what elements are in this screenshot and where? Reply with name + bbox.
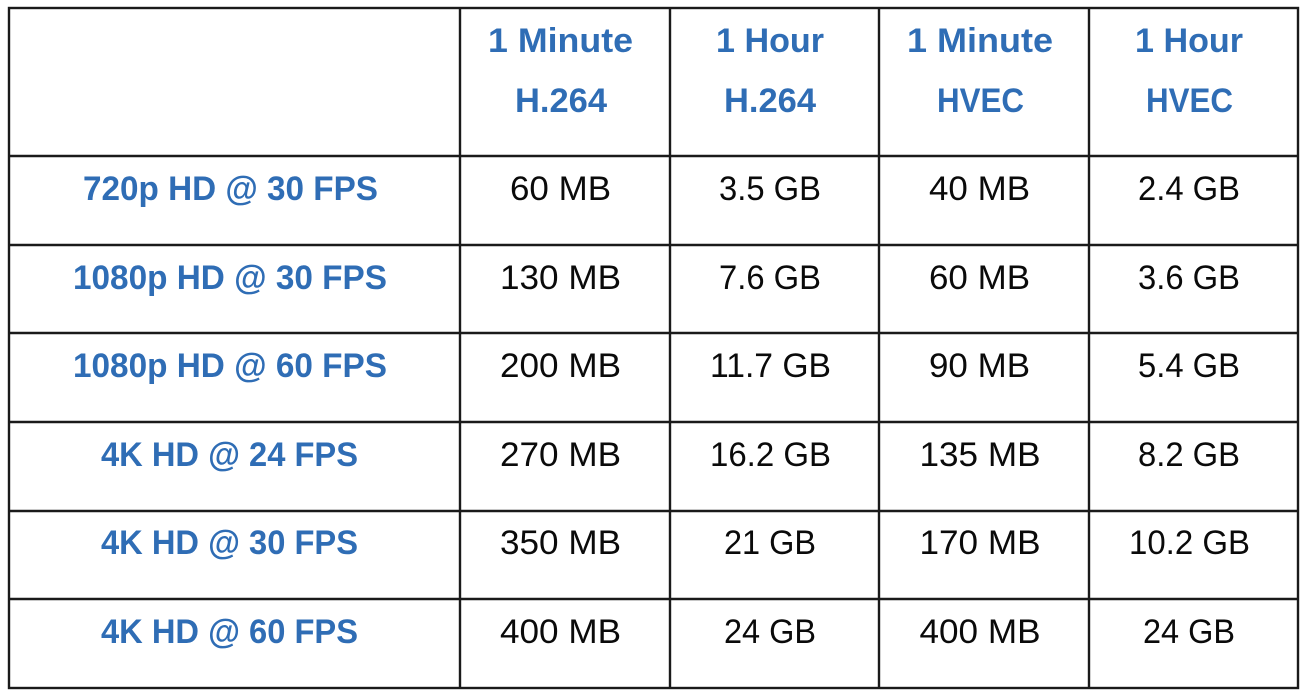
row: 4K HD at 30 FPS: 21 GB bbox=[724, 524, 816, 562]
row: 1080p HD at 60 FPS: 200 MB bbox=[500, 347, 621, 385]
row: 4K HD at 30 FPS: 4K HD @ 30 FPS bbox=[101, 524, 358, 562]
row: 4K HD at 60 FPS: 24 GB bbox=[1143, 613, 1235, 651]
row: 720p HD at 30 FPS: 60 MB bbox=[510, 170, 611, 208]
row: 4K HD at 24 FPS: 8.2 GB bbox=[1138, 436, 1240, 474]
column heading: 1 minute H.264: 1 Minute bbox=[488, 22, 633, 60]
header row bbox=[488, 22, 1243, 120]
row: 1080p HD at 60 FPS: 11.7 GB bbox=[710, 347, 831, 385]
column heading: 1 hour H.264 bbox=[716, 22, 824, 120]
column heading: 1 hour H.264: H.264 bbox=[724, 82, 816, 120]
row: 4K HD at 30 FPS: 350 MB bbox=[500, 524, 621, 562]
row: 1080p HD at 30 FPS: 3.6 GB bbox=[1138, 259, 1240, 297]
row: 4K HD at 30 FPS: 10.2 GB bbox=[1129, 524, 1250, 562]
row: 4K HD at 24 FPS: 4K HD @ 24 FPS bbox=[101, 436, 358, 474]
column heading: 1 minute H.264 bbox=[488, 22, 633, 120]
row: 1080p HD at 60 FPS: 5.4 GB bbox=[1138, 347, 1240, 385]
row: 720p HD at 30 FPS: 2.4 GB bbox=[1138, 170, 1240, 208]
row: 1080p HD at 60 FPS: 1080p HD @ 60 FPS bbox=[73, 347, 387, 385]
column heading: 1 minute HVEC: 1 Minute bbox=[907, 22, 1053, 60]
row: 4K HD at 60 FPS: 24 GB bbox=[724, 613, 816, 651]
column heading: 1 hour HVEC bbox=[1135, 22, 1243, 120]
row: 720p HD at 30 FPS bbox=[83, 170, 1240, 208]
row: 1080p HD at 30 FPS: 7.6 GB bbox=[719, 259, 821, 297]
row: 4K HD at 24 FPS bbox=[101, 436, 1240, 474]
row: 1080p HD at 60 FPS bbox=[73, 347, 1240, 385]
row: 1080p HD at 60 FPS: 90 MB bbox=[929, 347, 1030, 385]
column heading: 1 minute H.264: H.264 bbox=[515, 82, 607, 120]
row: 4K HD at 24 FPS: 135 MB bbox=[920, 436, 1040, 474]
row: 720p HD at 30 FPS: 3.5 GB bbox=[719, 170, 821, 208]
row: 720p HD at 30 FPS: 720p HD @ 30 FPS bbox=[83, 170, 378, 208]
row: 1080p HD at 30 FPS: 1080p HD @ 30 FPS bbox=[73, 259, 387, 297]
row: 1080p HD at 30 FPS bbox=[73, 259, 1240, 297]
row: 4K HD at 60 FPS bbox=[101, 613, 1235, 651]
row: 4K HD at 60 FPS: 4K HD @ 60 FPS bbox=[101, 613, 358, 651]
row: 720p HD at 30 FPS: 40 MB bbox=[929, 170, 1030, 208]
row: 4K HD at 60 FPS: 400 MB bbox=[920, 613, 1040, 651]
row: 4K HD at 60 FPS: 400 MB bbox=[500, 613, 621, 651]
column heading: 1 hour HVEC: 1 Hour bbox=[1135, 22, 1243, 60]
column heading: 1 minute HVEC: HVEC bbox=[937, 82, 1024, 120]
column heading: 1 hour H.264: 1 Hour bbox=[716, 22, 824, 60]
row: 4K HD at 30 FPS: 170 MB bbox=[920, 524, 1040, 562]
row: 1080p HD at 30 FPS: 60 MB bbox=[929, 259, 1030, 297]
row: 4K HD at 30 FPS bbox=[101, 524, 1250, 562]
row: 4K HD at 24 FPS: 270 MB bbox=[500, 436, 621, 474]
row: 1080p HD at 30 FPS: 130 MB bbox=[500, 259, 621, 297]
row: 4K HD at 24 FPS: 16.2 GB bbox=[710, 436, 831, 474]
column heading: 1 minute HVEC bbox=[907, 22, 1053, 120]
column heading: 1 hour HVEC: HVEC bbox=[1146, 82, 1233, 120]
